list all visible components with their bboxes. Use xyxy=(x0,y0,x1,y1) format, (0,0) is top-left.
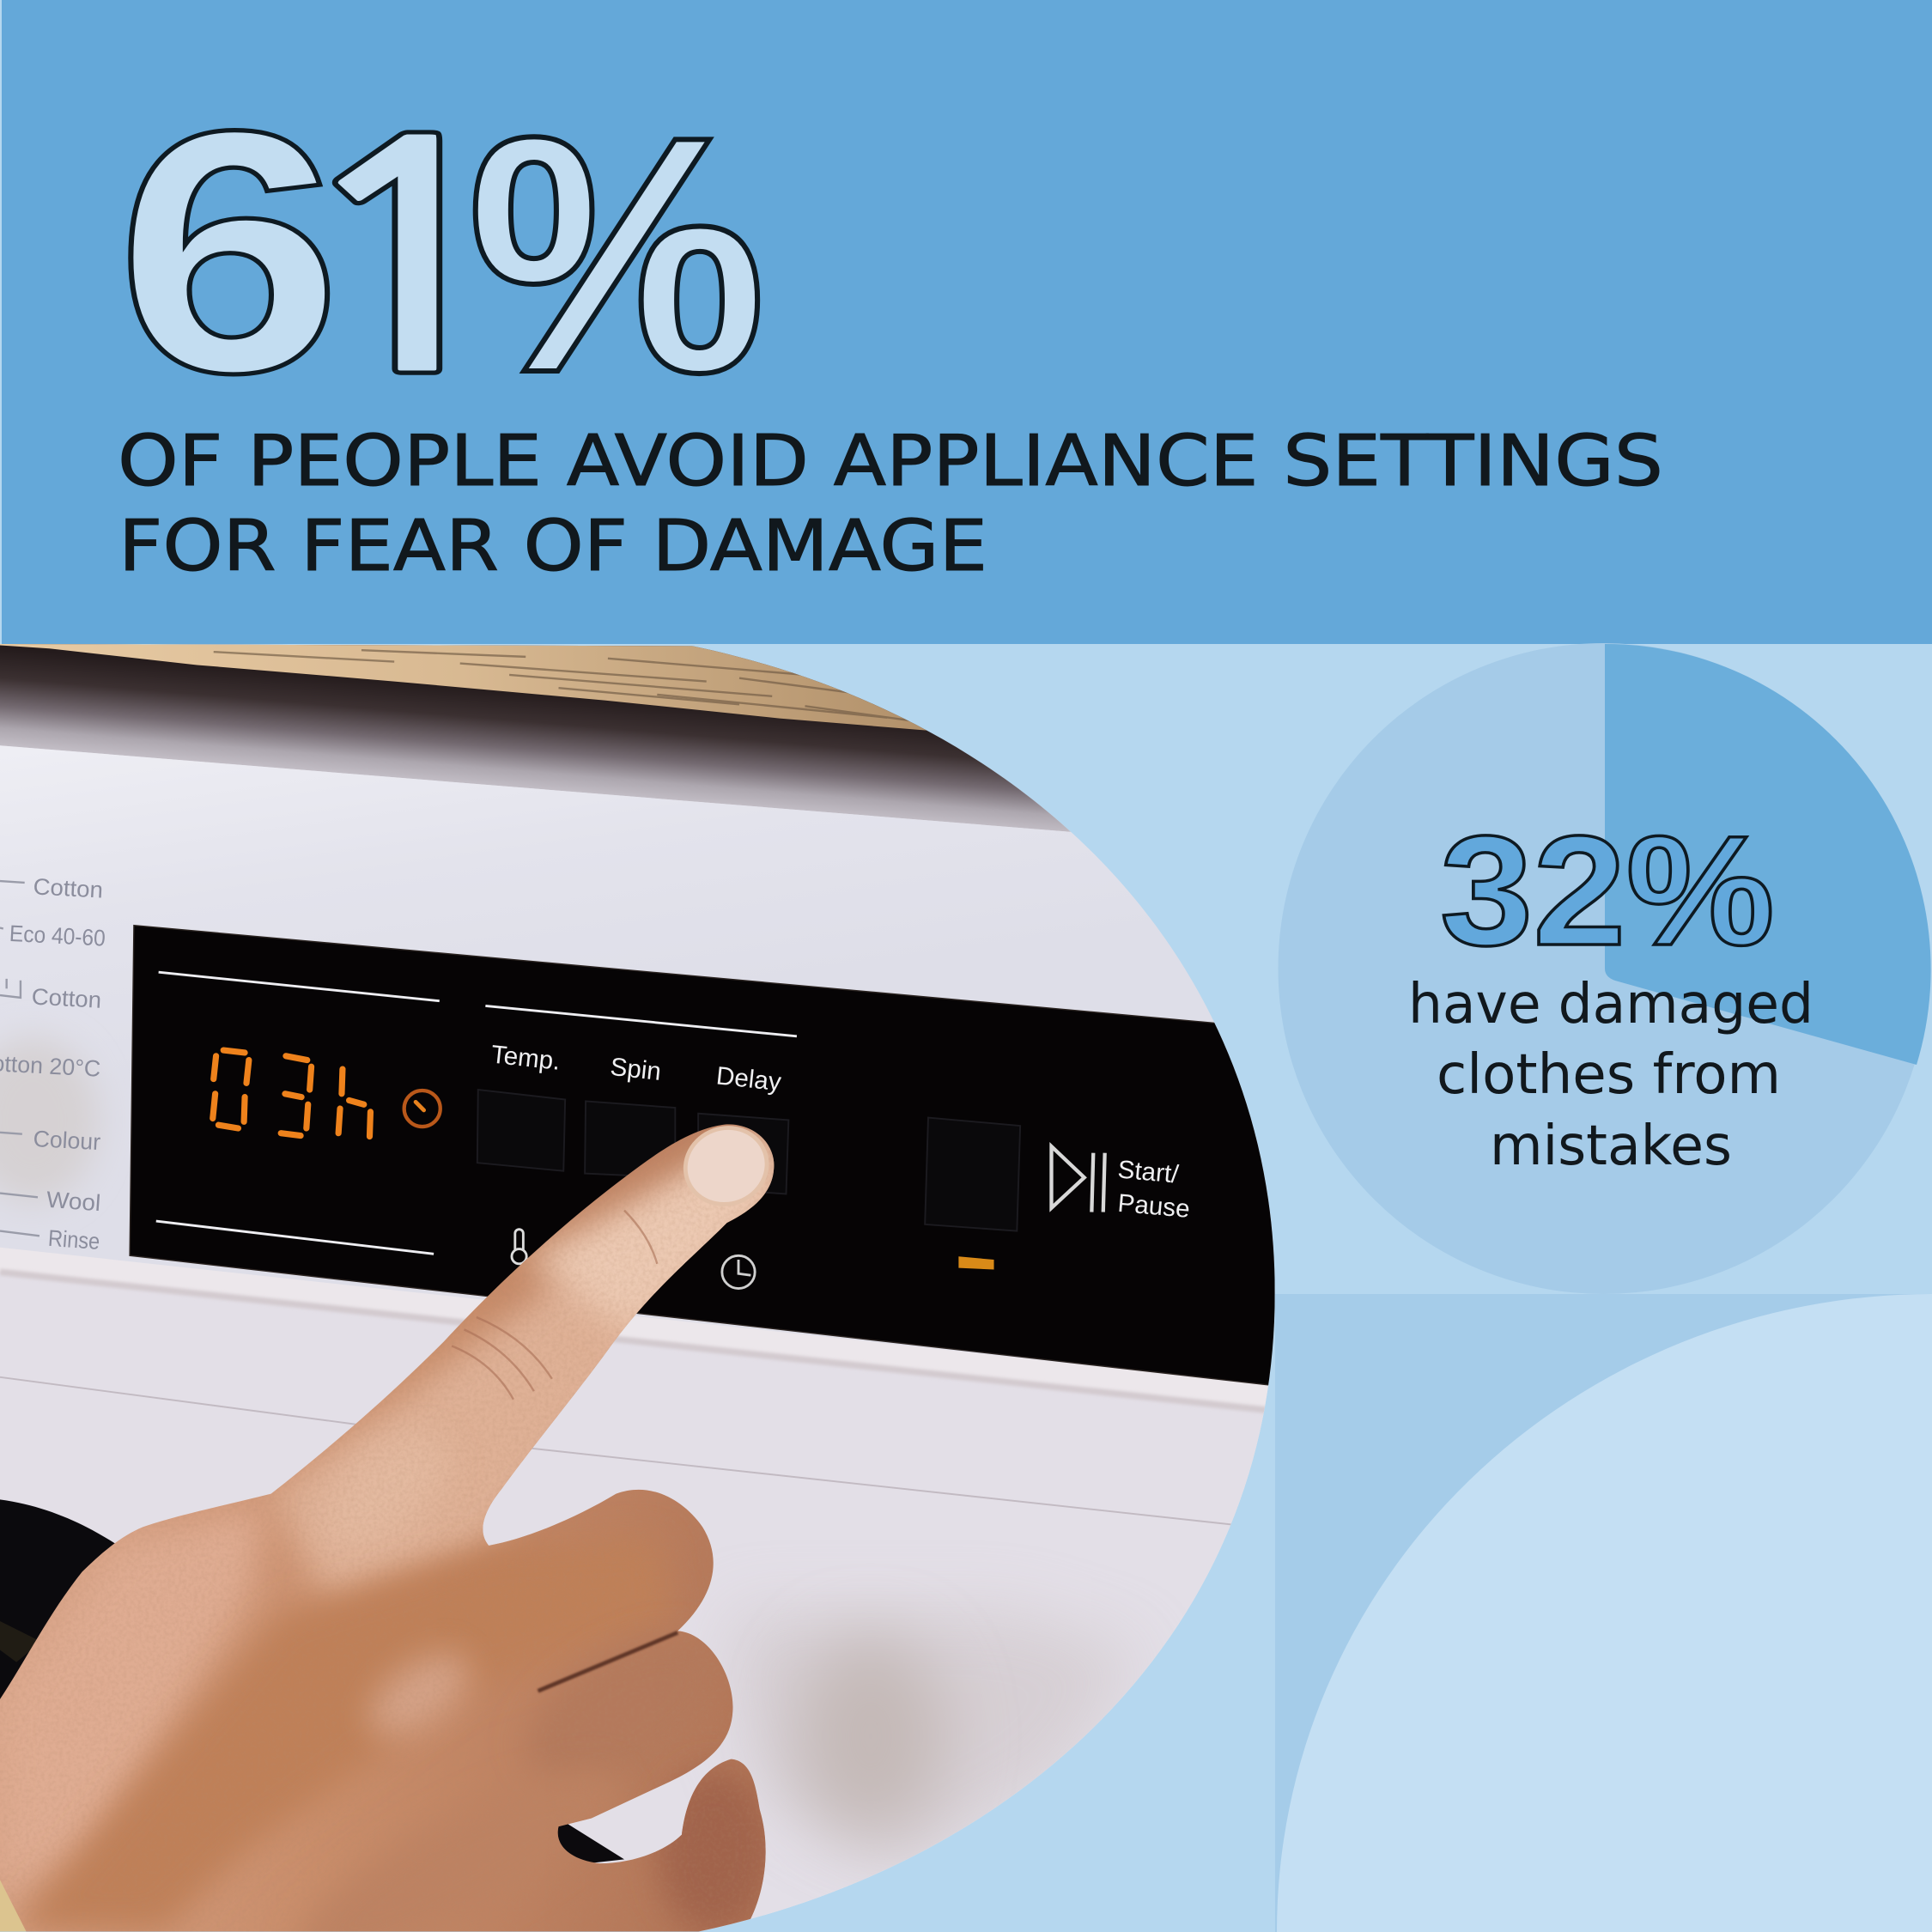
programme labels: Colour xyxy=(33,1126,101,1155)
headline text: FOR FEAR OF DAMAGE xyxy=(118,506,987,587)
shadow at left of panel xyxy=(0,1038,99,1202)
panel buttons xyxy=(477,1090,1020,1231)
wooden worktop xyxy=(0,644,927,731)
headline text xyxy=(118,421,1663,587)
button labels: Delay xyxy=(714,1061,782,1097)
button labels: Temp. xyxy=(489,1041,562,1076)
fingernail xyxy=(675,1116,778,1216)
header band xyxy=(2,0,1932,644)
photo: finger pressing washing machine control panel xyxy=(0,635,1281,1932)
hand xyxy=(0,1112,788,1932)
digital display: 03h xyxy=(213,1050,370,1137)
programme labels: Wool xyxy=(46,1187,101,1216)
programme labels: Cotton xyxy=(33,873,104,903)
black control panel xyxy=(130,926,1281,1386)
statistic caption: have damaged xyxy=(1408,973,1814,1036)
pie slice xyxy=(1605,644,1931,1065)
statistic: 32%: 32% xyxy=(1440,803,1775,978)
shadow under worktop xyxy=(0,644,1071,832)
panel lines xyxy=(156,972,797,1254)
button labels: Pause xyxy=(1116,1189,1191,1224)
big statistic: 61%: 6 xyxy=(116,60,342,445)
programme selector ticks xyxy=(0,881,39,1236)
upper white panel xyxy=(0,745,1214,1022)
icon: thermometer xyxy=(512,1230,526,1264)
icon: display clock xyxy=(404,1091,440,1127)
statistic caption xyxy=(1408,973,1814,1178)
knuckle creases xyxy=(452,1211,657,1400)
headline text: OF PEOPLE AVOID APPLIANCE SETTINGS xyxy=(118,421,1663,502)
indicator light xyxy=(958,1256,994,1270)
pie chart: 32% xyxy=(1278,643,1931,1294)
programme labels xyxy=(0,873,106,1255)
button labels: Spin xyxy=(609,1053,663,1086)
big statistic: 61% xyxy=(116,60,766,445)
big statistic: 61%: 1 xyxy=(282,106,534,420)
bottom-right quarter circle xyxy=(1277,1294,1932,1932)
washing machine door xyxy=(0,1499,115,1699)
hand shading xyxy=(0,1120,781,1932)
big statistic: 61%: % xyxy=(467,67,766,443)
button labels: Start/ xyxy=(1116,1155,1181,1189)
soft shadow on door xyxy=(731,1613,1142,1868)
icon: delay clock xyxy=(722,1255,755,1289)
skin texture xyxy=(0,1112,788,1932)
programme labels: Cotton xyxy=(31,984,102,1013)
button labels xyxy=(489,1041,1191,1224)
sleeve cuff xyxy=(0,1880,27,1932)
statistic caption: clothes from xyxy=(1437,1043,1781,1107)
icon: start/pause xyxy=(1051,1146,1105,1212)
lower white panel xyxy=(0,1248,1281,1932)
bottom-right square xyxy=(1275,1294,1932,1932)
programme labels: Eco 40-60 xyxy=(9,920,106,951)
programme labels: Rinse xyxy=(47,1225,100,1255)
statistic caption: mistakes xyxy=(1490,1115,1732,1178)
finger gap shadow xyxy=(538,1632,677,1691)
